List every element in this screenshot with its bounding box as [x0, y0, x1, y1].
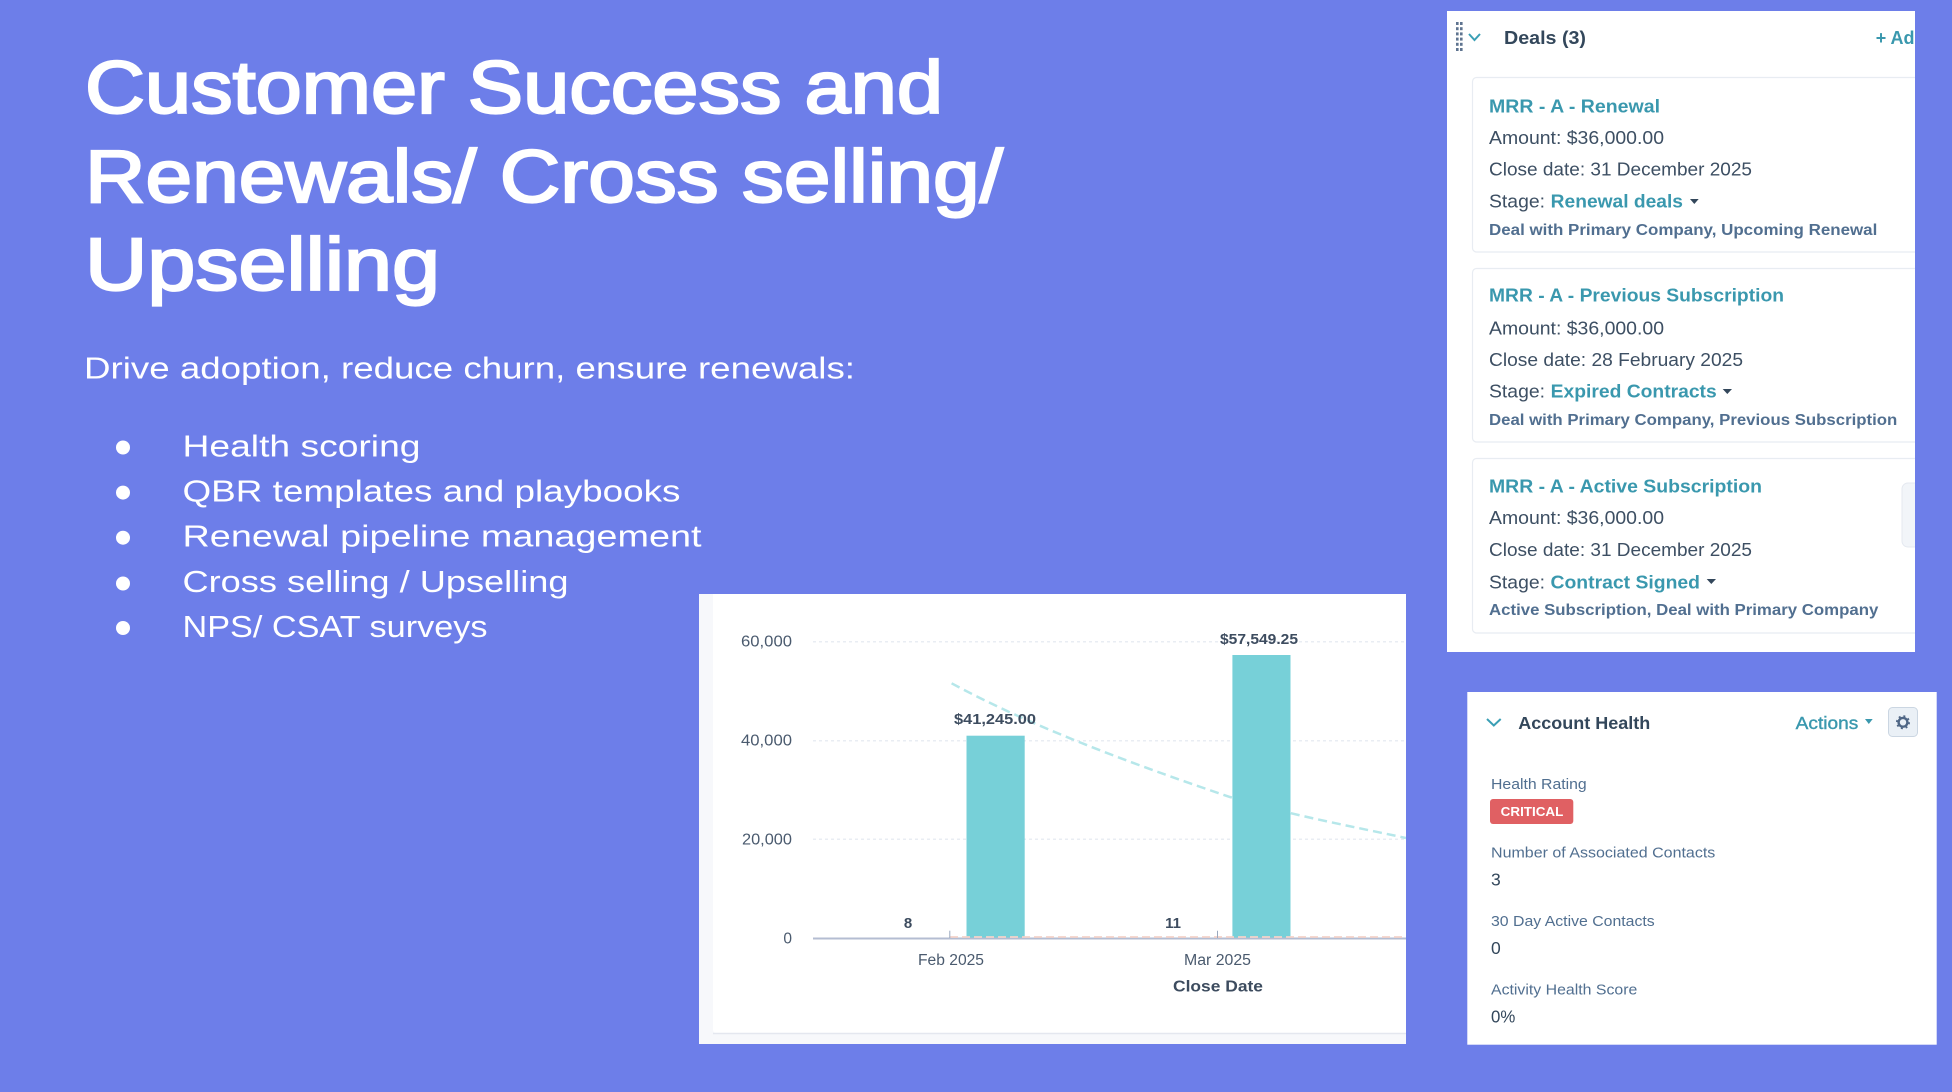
value labels: 8: [904, 915, 912, 932]
card: previous subscription: Expired Contracts: [1551, 382, 1717, 402]
card: renewal deal: MRR - A - Renewal: [1489, 95, 1660, 116]
bullet list: Renewal pipeline management: [182, 518, 702, 554]
card: renewal deal: Deal with Primary Company, Upcoming Renewal: [1489, 222, 1877, 239]
panel: deals: [1447, 11, 1942, 652]
field: active contacts: 0: [1491, 938, 1501, 958]
field: activity score: 0%: [1491, 1007, 1515, 1027]
field: associated contacts: Number of Associated Contacts: [1491, 844, 1715, 861]
card: active subscription: Close date: 31 December 2025: [1489, 540, 1752, 560]
bullet list: [116, 428, 702, 644]
field: associated contacts: [1491, 844, 1715, 890]
card: renewal deal: Stage:: [1489, 191, 1545, 211]
card: active subscription: [1472, 458, 1942, 633]
field: health rating: Health Rating: [1491, 776, 1587, 793]
x axis labels: Close Date: [1173, 979, 1263, 996]
deals heading: Deals (3): [1504, 28, 1586, 48]
card: active subscription: Amount: $36,000.00: [1489, 508, 1664, 528]
actions menu: Actions: [1796, 713, 1859, 733]
y axis labels: 20,000: [742, 832, 792, 848]
card: renewal deal: Renewal deals: [1551, 191, 1683, 211]
axis line: [813, 938, 1406, 940]
field: active contacts: [1491, 913, 1655, 958]
card: active subscription: Active Subscription, Deal with Primary Company: [1489, 602, 1879, 619]
add link: + Add: [1876, 28, 1926, 48]
x axis labels: [919, 954, 1262, 992]
y axis labels: 40,000: [741, 732, 792, 750]
bullet list: Health scoring: [182, 428, 420, 464]
card: previous subscription: MRR - A - Previous Subscription: [1489, 285, 1784, 306]
icon: chevron: [1487, 719, 1501, 726]
account health heading: Account Health: [1518, 713, 1650, 733]
card: previous subscription: Deal with Primary Company, Previous Subscription: [1489, 412, 1897, 429]
card: active subscription: Contract Signed: [1550, 572, 1700, 592]
title: Customer Success and: [85, 46, 943, 129]
trend line: [952, 683, 1406, 838]
card: previous subscription: Amount: $36,000.00: [1489, 318, 1664, 338]
card: previous subscription: [1472, 268, 1942, 442]
field: associated contacts: 3: [1491, 870, 1501, 890]
icon: chevron: [1469, 34, 1480, 40]
value labels: $41,245.00: [954, 711, 1036, 728]
bullet list: Cross selling / Upselling: [182, 564, 568, 599]
bullet list: QBR templates and playbooks: [182, 474, 680, 508]
icon: drag grip: [1456, 22, 1463, 51]
card: renewal deal: [1472, 78, 1942, 252]
bullet list: NPS/ CSAT surveys: [182, 609, 488, 644]
bar: Mar 2025: [1232, 655, 1290, 938]
y axis labels: [741, 634, 792, 948]
value labels: $57,549.25: [1220, 631, 1298, 648]
y axis labels: 60,000: [741, 634, 792, 650]
field: activity score: [1491, 981, 1637, 1027]
title: [85, 46, 1003, 306]
field: activity score: Activity Health Score: [1491, 981, 1637, 998]
icon: settings button: [1888, 708, 1918, 736]
card: active subscription: Stage:: [1489, 572, 1545, 592]
card: active subscription: MRR - A - Active Subscription: [1489, 475, 1762, 496]
field: health rating: CRITICAL: [1501, 805, 1564, 819]
title: Upselling: [85, 223, 440, 306]
field: active contacts: 30 Day Active Contacts: [1491, 913, 1655, 930]
y axis labels: 0: [783, 930, 792, 948]
card: renewal deal: Amount: $36,000.00: [1489, 128, 1664, 148]
value labels: 11: [1165, 915, 1181, 932]
card: previous subscription: Close date: 28 February 2025: [1489, 350, 1743, 370]
scroll tab: [1902, 482, 1915, 548]
value labels: [904, 631, 1298, 932]
bar: Feb 2025: [966, 736, 1025, 938]
x axis labels: Mar 2025: [1184, 952, 1251, 969]
card: previous subscription: Stage:: [1489, 382, 1545, 402]
title: Renewals/ Cross selling/: [85, 135, 1003, 218]
panel: account health: [1467, 692, 1937, 1045]
panel: bar chart: [699, 590, 1413, 1044]
card: renewal deal: Close date: 31 December 2025: [1489, 160, 1752, 180]
subtitle: Drive adoption, reduce churn, ensure renewals:: [84, 350, 855, 386]
x axis labels: Feb 2025: [918, 952, 984, 969]
field: health rating: [1490, 776, 1587, 824]
